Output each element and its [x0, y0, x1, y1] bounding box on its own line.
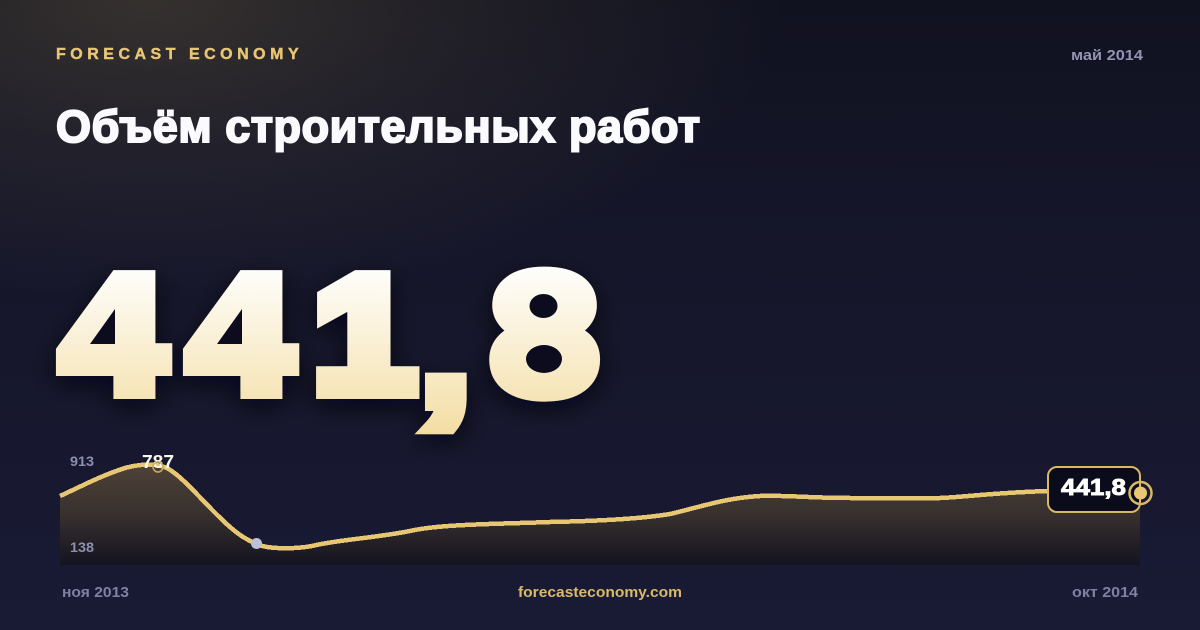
- big value: 441: [62, 242, 416, 426]
- area under line: [60, 465, 1140, 565]
- min axis label: 138: [70, 539, 94, 555]
- current value callout: [1048, 467, 1140, 512]
- low marker: [251, 538, 262, 549]
- big value: [62, 240, 597, 435]
- max axis label: 913: [70, 453, 94, 469]
- sparkline chart: [60, 452, 1152, 565]
- big value: ,: [422, 267, 469, 435]
- end date: окт 2014: [1072, 584, 1139, 601]
- current value callout: 441,8: [1061, 474, 1126, 500]
- title: Объём строительных работ: [56, 101, 700, 152]
- start date: ноя 2013: [62, 584, 129, 601]
- current marker: [1130, 482, 1152, 504]
- brand label: FORECAST ECONOMY: [56, 46, 303, 63]
- source: forecasteconomy.com: [518, 584, 682, 601]
- value line: [60, 465, 1047, 548]
- big value: 8: [492, 240, 597, 428]
- peak label: 787: [142, 452, 174, 472]
- date: май 2014: [1071, 47, 1144, 64]
- peak marker: [153, 462, 163, 472]
